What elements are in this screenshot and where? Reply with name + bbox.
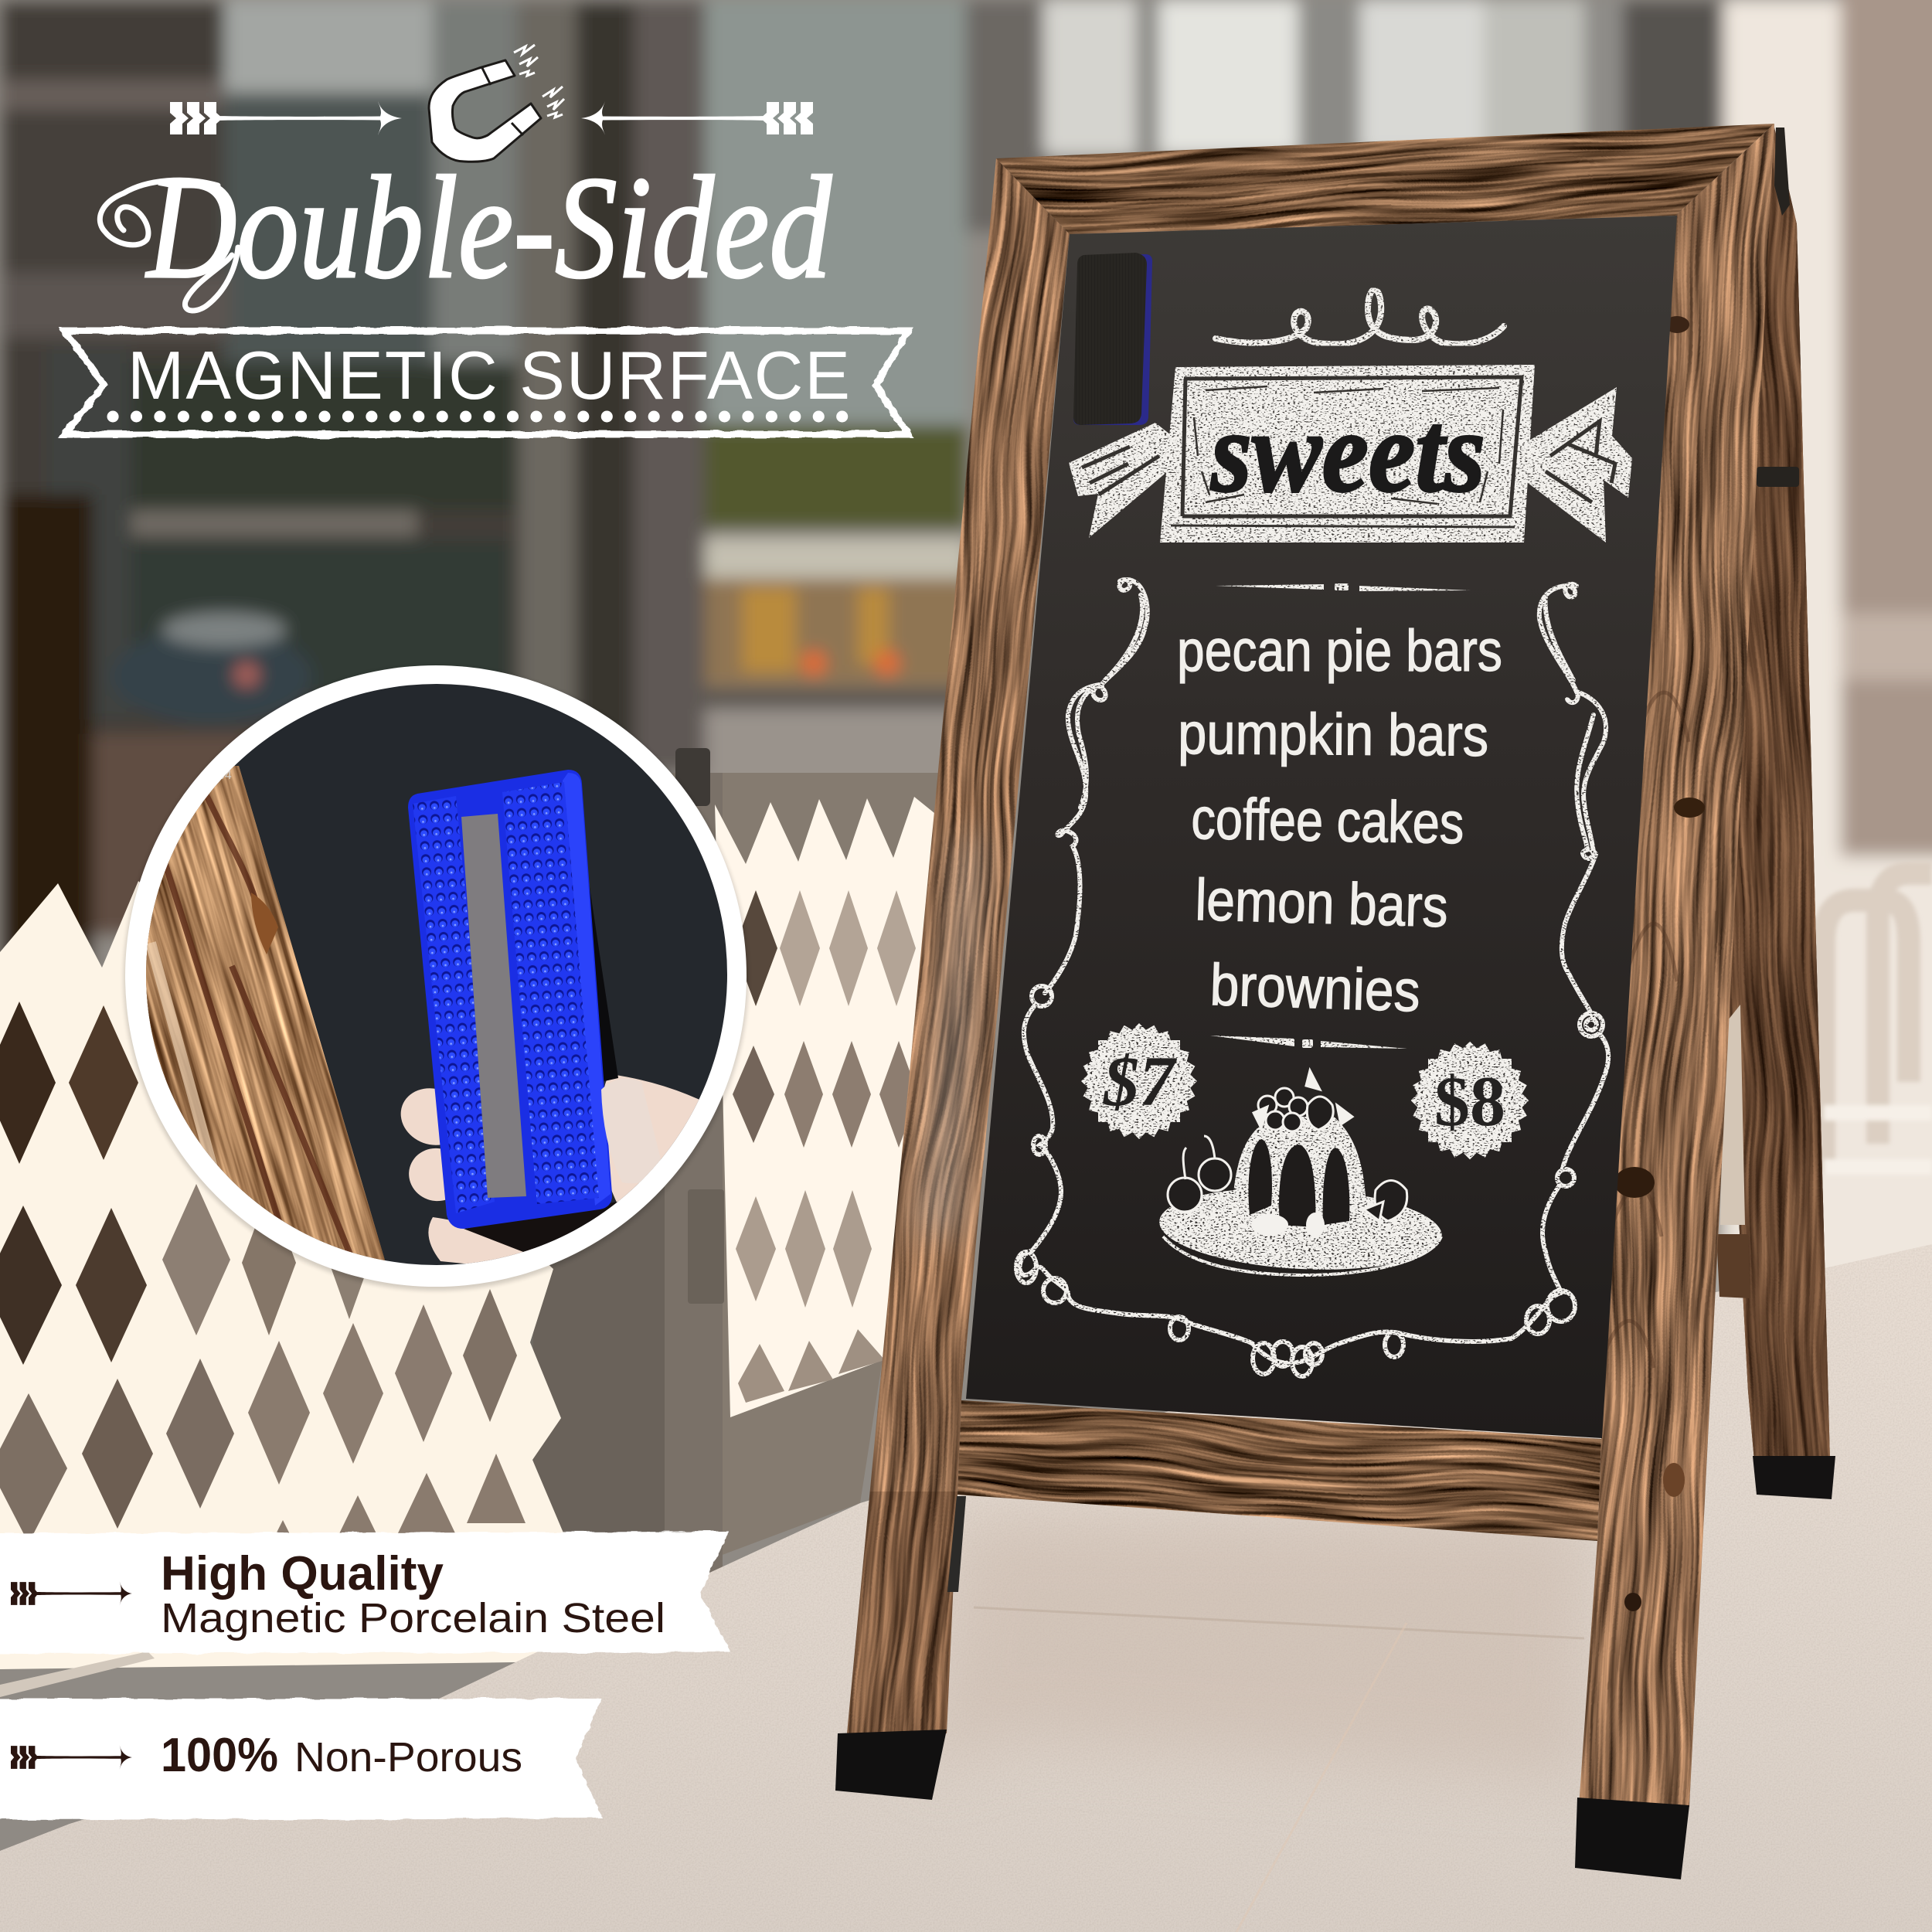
rear cross brace bbox=[1716, 1234, 1750, 1298]
side strawberry bbox=[1375, 1181, 1407, 1221]
price burst $7: $7 bbox=[1102, 1042, 1178, 1121]
door panel behind lattice bbox=[665, 773, 974, 1577]
cream panel behind bbox=[1720, 1005, 1745, 1225]
glaze drips bbox=[1251, 1213, 1325, 1237]
sign wooden frame bbox=[692, 39, 1900, 1877]
sign hinge bbox=[1757, 128, 1799, 487]
sweets candy banner bbox=[1069, 365, 1632, 543]
inset wood edge bbox=[0, 597, 601, 1443]
icon: left arrow bbox=[170, 101, 402, 135]
item: lemon bars: lemon bars bbox=[1195, 867, 1449, 940]
price burst $8 bbox=[1411, 1042, 1529, 1159]
chalk top swirl bbox=[1216, 290, 1504, 344]
decorative chalk frame bbox=[1016, 580, 1608, 1376]
title flourish bbox=[100, 180, 238, 311]
ribbon dots bbox=[113, 411, 863, 422]
frame bottom rail bbox=[957, 1400, 1601, 1541]
text: high quality: High Quality bbox=[161, 1547, 444, 1600]
rear rubber foot bbox=[1753, 1456, 1835, 1499]
small edge mark: 04 bbox=[218, 769, 232, 782]
lattice screen on door bbox=[715, 797, 951, 1417]
item: pecan pie bars: pecan pie bars bbox=[1177, 618, 1502, 684]
candy wrapper right bbox=[1522, 387, 1632, 543]
menu list text bbox=[1177, 618, 1502, 1025]
icon: horseshoe magnet bbox=[429, 45, 564, 162]
bike racks in background bbox=[1824, 873, 1932, 1175]
icon: arrow bbox=[11, 1745, 132, 1770]
icon: arrow bbox=[11, 1581, 132, 1606]
inset hand bbox=[393, 1074, 711, 1267]
chalk cake illustration bbox=[1158, 1070, 1444, 1277]
feature ribbon: non-porous bbox=[0, 1699, 603, 1820]
divider top bbox=[1216, 583, 1471, 591]
text: 100% non-porous: 100% bbox=[161, 1729, 278, 1782]
door hardware bbox=[675, 748, 724, 1304]
icon: right arrow bbox=[581, 101, 813, 135]
rubber feet bbox=[835, 1730, 1689, 1879]
sidewalk floor bbox=[0, 1236, 1932, 1932]
berries on top bbox=[1253, 1070, 1352, 1131]
cake dark panels bbox=[1248, 1139, 1349, 1227]
frame left stile bbox=[847, 158, 1070, 1733]
feature ribbon: high quality bbox=[0, 1532, 730, 1654]
bracket bbox=[947, 1496, 966, 1592]
cherries bbox=[1168, 1136, 1407, 1221]
ribbon frame bbox=[65, 331, 908, 434]
item: coffee cakes: coffee cakes bbox=[1191, 786, 1464, 856]
item: brownies: brownies bbox=[1209, 952, 1421, 1025]
title: double-sided: Double-Sided bbox=[145, 147, 832, 309]
price burst $7 bbox=[1081, 1023, 1197, 1139]
item: pumpkin bars: pumpkin bars bbox=[1178, 701, 1488, 769]
text: 100% non-porous: Non-Porous bbox=[294, 1734, 522, 1781]
headline group: double-sided magnetic surface bbox=[65, 45, 908, 434]
magnet strip bbox=[461, 814, 526, 1198]
chalkboard panel bbox=[966, 216, 1677, 1438]
cake dome and glaze bbox=[1233, 1116, 1366, 1236]
divider bottom bbox=[1210, 1036, 1407, 1049]
plate bbox=[1158, 1181, 1444, 1277]
subtitle: magnetic surface: MAGNETIC SURFACE bbox=[128, 337, 850, 413]
eraser studs left bbox=[413, 796, 495, 1213]
magnet sparks bbox=[514, 45, 564, 117]
a-frame sign rear leg bbox=[1717, 128, 1835, 1499]
eraser blue body bbox=[408, 770, 612, 1229]
candy wrapper left bbox=[1069, 423, 1178, 538]
felt pad edge bbox=[583, 846, 618, 1082]
text: magnetic porcelain steel: Magnetic Porcelain Steel bbox=[161, 1595, 665, 1641]
price burst $8: $8 bbox=[1434, 1062, 1505, 1141]
frame top rail bbox=[996, 124, 1774, 234]
candy outline cuts bbox=[1082, 377, 1615, 527]
eraser studs right bbox=[502, 782, 599, 1204]
frame right stile bbox=[1580, 124, 1774, 1807]
circular inset: magnetic eraser back bbox=[122, 665, 750, 1292]
magnetic eraser on board bbox=[1073, 253, 1152, 425]
sweets wordmark: sweets bbox=[1210, 388, 1485, 516]
candy centre block bbox=[1160, 365, 1535, 543]
lattice screen on left window bbox=[0, 881, 569, 1669]
thumb over eraser bbox=[601, 1079, 665, 1183]
